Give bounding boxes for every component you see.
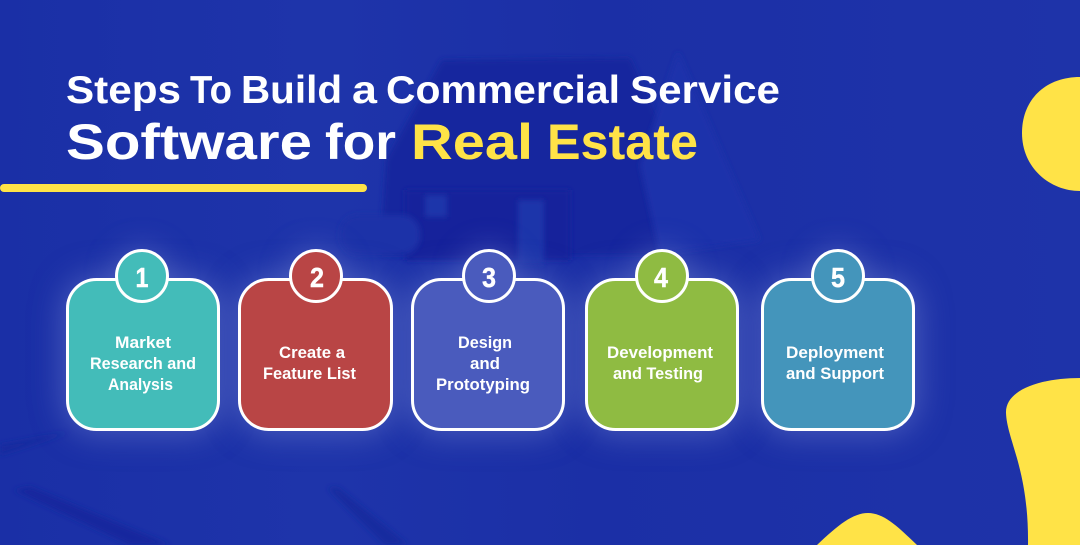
step 4 badge: 4 (654, 262, 668, 293)
step 2 label: Feature List (263, 365, 356, 383)
step 5 badge: 5 (831, 262, 845, 293)
step 4 badge (636, 250, 688, 302)
step 4 card (586, 250, 738, 430)
step 2 label (263, 344, 356, 383)
step 4 label: and Testing (613, 365, 703, 383)
step 5 label: and Support (786, 365, 885, 383)
step 3 label: and (470, 355, 500, 373)
title line 2: Real (411, 114, 533, 170)
title line 1: Build (241, 69, 342, 112)
step 5 card (762, 250, 914, 430)
title line 1: a (352, 69, 377, 112)
title line 2: Software (66, 114, 312, 170)
decorative yellow blob: lower right (1006, 378, 1080, 545)
step 1 badge (116, 250, 168, 302)
decorative yellow blob: upper right (1022, 77, 1080, 191)
title line 2 (66, 114, 698, 170)
step 5 badge (812, 250, 864, 302)
step 2 badge: 2 (310, 262, 324, 293)
title line 1: Commercial (386, 69, 620, 112)
step 3 badge (464, 250, 514, 302)
step 2 card (240, 250, 392, 430)
step 2 badge (290, 250, 342, 302)
title line 2: Estate (547, 114, 698, 170)
step 3 badge: 3 (482, 262, 496, 293)
step 3 label: Design (458, 334, 512, 352)
step 3 label (436, 334, 530, 394)
title (66, 69, 780, 170)
title underline (0, 184, 367, 192)
title line 1: To (190, 69, 232, 112)
title line 1: Steps (66, 69, 181, 112)
step 5 label: Deployment (786, 344, 885, 362)
step 3 card (412, 250, 564, 430)
title line 1: Service (630, 69, 780, 112)
step 1 badge: 1 (136, 262, 148, 293)
step 1 label (90, 334, 196, 394)
step 2 label: Create a (279, 344, 346, 362)
step 3 label: Prototyping (436, 376, 530, 394)
decorative yellow blob: bottom (817, 513, 917, 545)
step 5 label (786, 344, 885, 383)
step 1 card (68, 250, 218, 430)
step 1 label: Research and (90, 355, 196, 373)
step 1 label: Market (115, 334, 172, 352)
title line 1 (66, 69, 780, 112)
step 4 label (607, 344, 714, 383)
title line 2: for (325, 114, 396, 170)
step 1 label: Analysis (108, 376, 173, 394)
step 4 label: Development (607, 344, 714, 362)
